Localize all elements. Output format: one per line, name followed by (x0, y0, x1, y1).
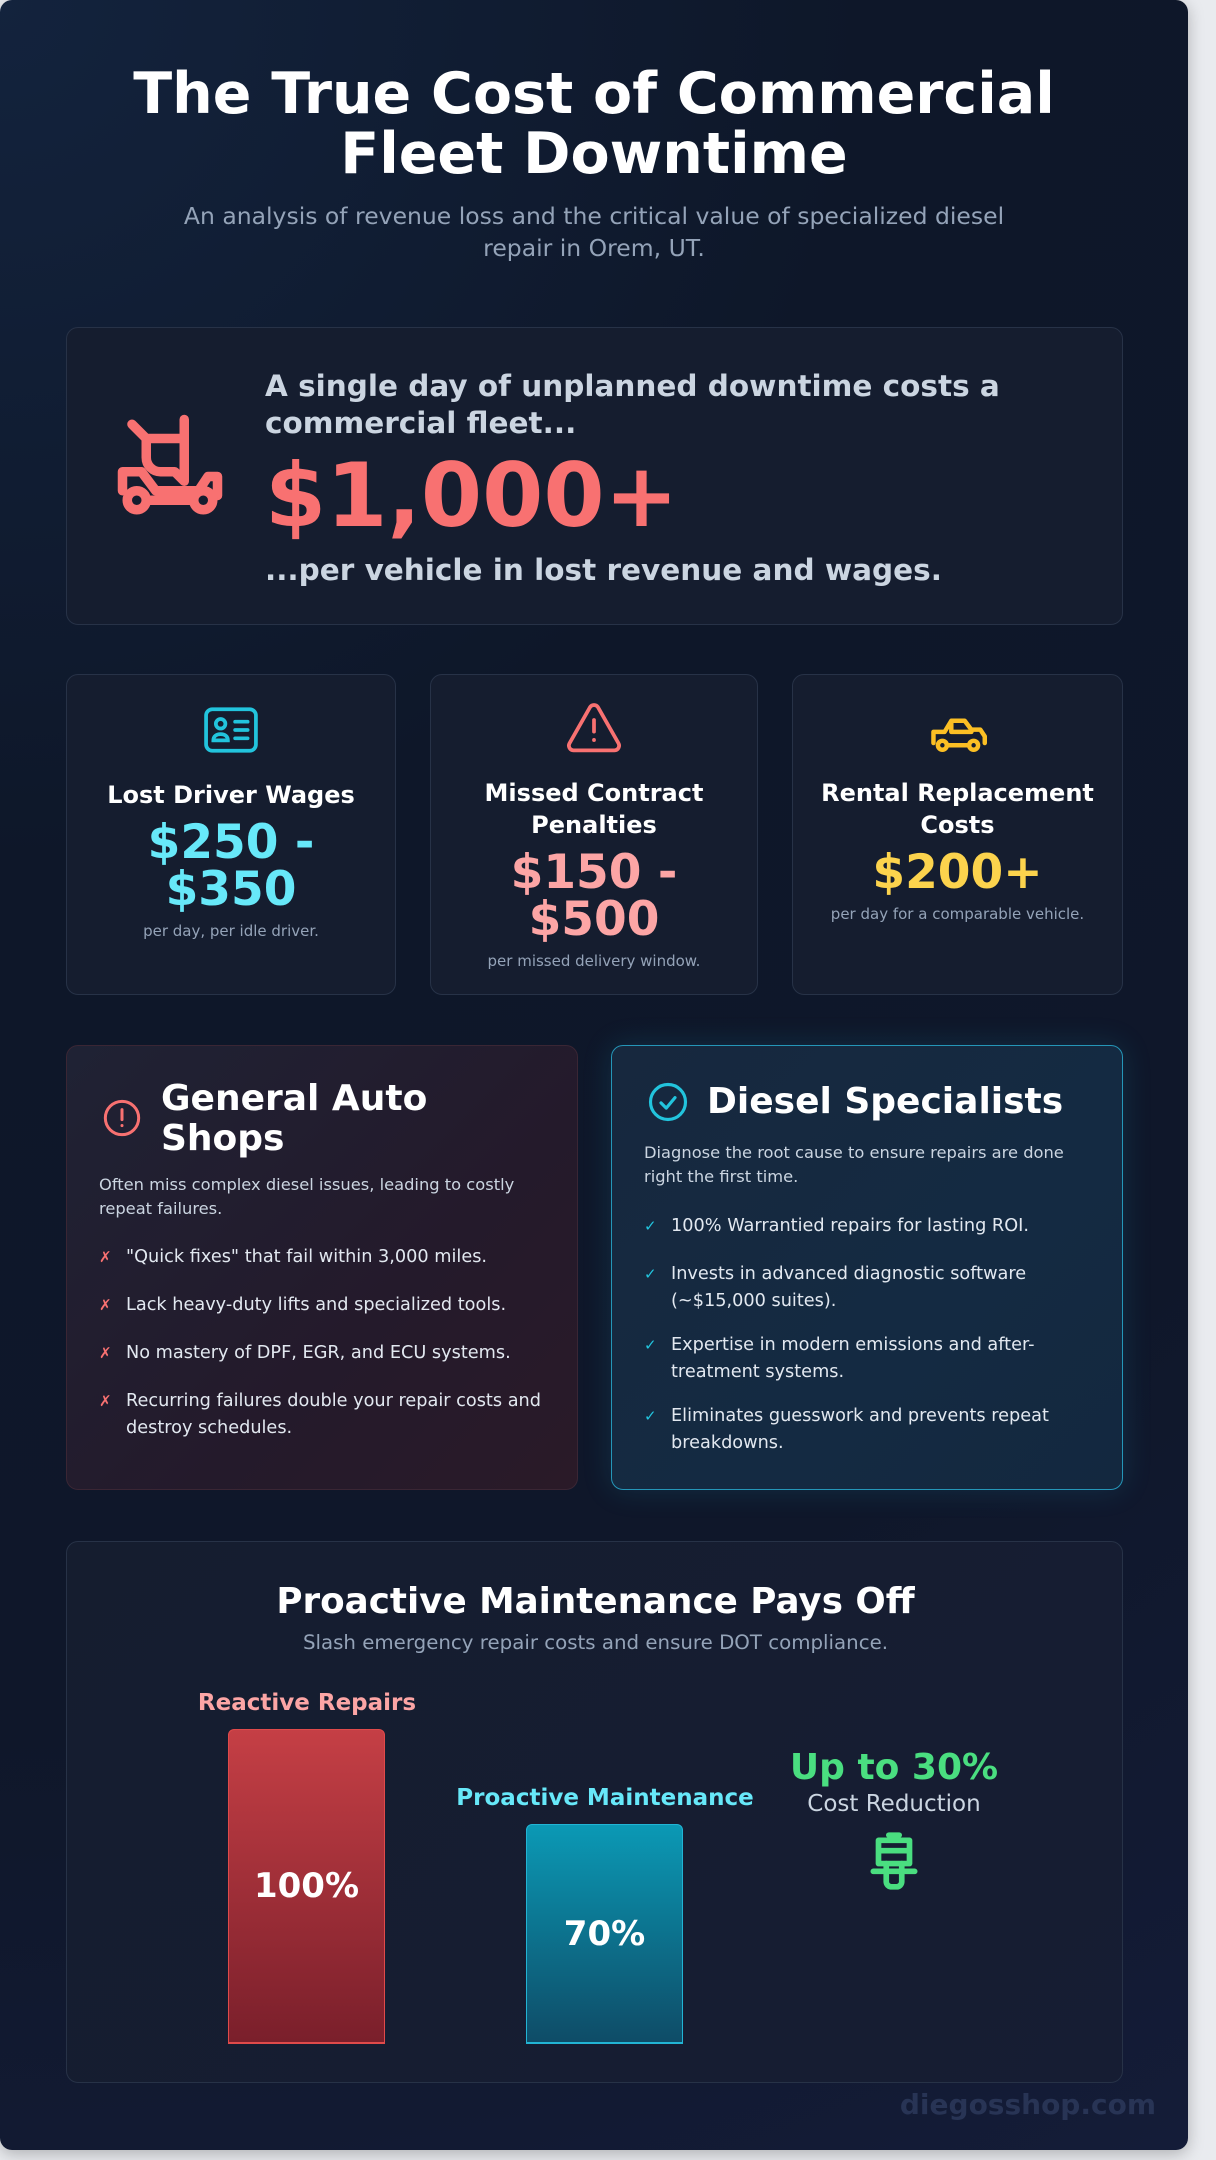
subheading: Slash emergency repair costs and ensure DOT compliance. (303, 1631, 888, 1654)
panel: rental costs: Costs (920, 811, 995, 839)
bar: proactive: Proactive Maintenance (456, 1785, 754, 1811)
subtitle: An analysis of revenue loss and the critical value of specialized diesel (184, 202, 1004, 230)
description: Diagnose the root cause to ensure repairs are done right the first time. (644, 1143, 1064, 1186)
description: Often miss complex diesel issues, leading to costly repeat failures. (99, 1175, 514, 1218)
callout: cost reduction: Up to 30% (790, 1747, 998, 1788)
callout: cost reduction (790, 1747, 998, 1890)
list: failures: Lack heavy-duty lifts and specialized tools. (126, 1295, 506, 1315)
list: failures: ✗ (99, 1296, 112, 1314)
panel: proactive maintenance chart (66, 1541, 1123, 2083)
panel: general auto shops (66, 1045, 578, 1490)
bar: reactive: 100% (254, 1866, 359, 1906)
icon: rental truck (931, 718, 987, 752)
bar: proactive (456, 1785, 754, 2044)
icon: truck (118, 414, 222, 514)
list: benefits: 100% Warrantied repairs for lasting ROI. (671, 1216, 1029, 1236)
panel: contract penalties: $150 - (511, 845, 677, 900)
panel: rental costs: Rental Replacement (821, 779, 1094, 807)
heading: Shops (161, 1118, 284, 1159)
list: failures: ✗ (99, 1248, 112, 1266)
heading: Diesel Specialists (707, 1081, 1063, 1122)
heading: Proactive Maintenance Pays Off (276, 1581, 915, 1622)
icon: check circle (648, 1082, 688, 1122)
list: failures (99, 1247, 541, 1438)
icon: savings (870, 1832, 918, 1890)
panel: rental costs (792, 674, 1123, 995)
bar: reactive (198, 1690, 416, 2044)
panel: contract penalties: Missed Contract (485, 779, 703, 807)
hero text: $1,000+ (265, 444, 678, 547)
list: benefits: ✓ (644, 1336, 657, 1354)
panel: driver wages: Lost Driver Wages (107, 781, 355, 809)
list: benefits: ✓ (644, 1217, 657, 1235)
icon: warning (567, 703, 621, 752)
panel: contract penalties: $500 (529, 892, 659, 947)
panel: diesel specialists (611, 1045, 1123, 1490)
watermark: diegosshop.com (900, 2088, 1156, 2121)
panel: rental costs: $200+ (872, 845, 1043, 900)
panel: driver wages (66, 674, 396, 995)
panel: driver wages: per day, per idle driver. (143, 922, 319, 940)
panel: rental costs: per day for a comparable vehicle. (831, 905, 1084, 923)
icon: alert circle (104, 1100, 140, 1136)
list: benefits: Invests in advanced diagnostic software (~$15,000 suites). (671, 1264, 1026, 1311)
hero text (265, 369, 1000, 587)
list: benefits: Eliminates guesswork and prevents repeat breakdowns. (671, 1406, 1049, 1453)
panel: driver wages: $250 - (148, 815, 314, 870)
list: failures: No mastery of DPF, EGR, and ECU systems. (126, 1343, 511, 1363)
list: failures: ✗ (99, 1344, 112, 1362)
list: failures: ✗ (99, 1392, 112, 1410)
list: benefits: Expertise in modern emissions and after-treatment systems. (671, 1335, 1035, 1382)
panel: contract penalties: Penalties (531, 811, 657, 839)
bar: reactive: Reactive Repairs (198, 1690, 416, 1716)
callout: cost reduction: Cost Reduction (807, 1791, 981, 1817)
bar: proactive: 70% (564, 1914, 645, 1954)
hero text: A single day of unplanned downtime costs a commercial fleet... (265, 369, 1000, 440)
subtitle (184, 202, 1004, 262)
list: failures: "Quick fixes" that fail within 3,000 miles. (126, 1247, 487, 1267)
title: The True Cost of Commercial (133, 61, 1055, 127)
panel: hero cost (66, 327, 1123, 625)
hero text: ...per vehicle in lost revenue and wages. (265, 553, 942, 587)
list: benefits: ✓ (644, 1407, 657, 1425)
title: Fleet Downtime (340, 121, 848, 187)
subtitle: repair in Orem, UT. (483, 234, 705, 262)
title (133, 61, 1055, 187)
heading (161, 1078, 427, 1159)
list: failures: Recurring failures double your repair costs and destroy schedules. (126, 1391, 541, 1438)
panel: contract penalties: per missed delivery window. (488, 952, 700, 970)
list: benefits: ✓ (644, 1265, 657, 1283)
heading: General Auto (161, 1078, 427, 1119)
panel: contract penalties (430, 674, 758, 995)
panel: driver wages: $350 (166, 862, 296, 917)
icon: id card (204, 707, 258, 753)
list: benefits (644, 1216, 1049, 1453)
